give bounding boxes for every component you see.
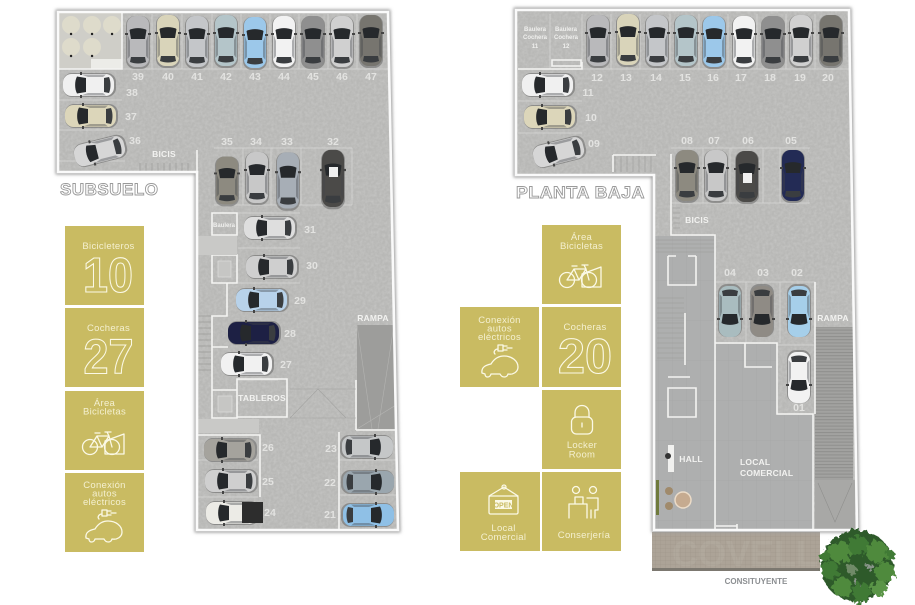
bay numbers: 34 xyxy=(250,136,262,148)
icon: padlock xyxy=(572,406,592,434)
bay numbers: 14 xyxy=(650,72,662,84)
bay numbers: 32 xyxy=(327,136,339,148)
room labels: BICIS xyxy=(685,215,709,225)
tile: bicicleteros: 10 xyxy=(83,249,133,303)
tile: conexion autos electricos: autos xyxy=(92,488,117,500)
tree xyxy=(820,530,896,605)
outer wall xyxy=(516,10,857,530)
bay numbers: 16 xyxy=(707,72,719,84)
cars: lower bays xyxy=(717,284,812,403)
room labels: 12 xyxy=(563,44,570,50)
tile: conexion autos electricos: Conexión xyxy=(83,480,126,491)
room labels: Baulera xyxy=(555,27,578,33)
icon: electric car xyxy=(482,345,518,377)
tile: cocheras 27: 27 xyxy=(84,330,134,384)
bay numbers: 07 xyxy=(708,135,720,147)
room labels: Baulera xyxy=(524,27,547,33)
floor outline shadow xyxy=(516,10,857,530)
light landing patches xyxy=(198,236,259,433)
white columns xyxy=(656,150,808,285)
bay numbers: 44 xyxy=(278,71,290,83)
bay numbers: 45 xyxy=(307,71,319,83)
bay numbers: 11 xyxy=(582,87,594,99)
bay numbers: 13 xyxy=(620,72,632,84)
bay numbers: 38 xyxy=(126,87,138,99)
bay numbers: 41 xyxy=(191,71,203,83)
tile: conserjeria: Conserjería xyxy=(558,530,611,541)
cars: left column xyxy=(522,72,588,171)
tile: area bicicletas: Área xyxy=(571,232,593,243)
tile: conexion autos electricos: Conexión xyxy=(478,315,521,326)
tile: cocheras 20: Cocheras xyxy=(563,322,607,333)
bay numbers: 21 xyxy=(324,509,336,521)
bay numbers: 22 xyxy=(324,477,336,489)
bay numbers: 30 xyxy=(306,260,318,272)
concrete floor xyxy=(516,10,857,530)
bay numbers xyxy=(125,71,377,521)
room labels xyxy=(152,149,389,403)
tile: area bicicletas: Bicicletas xyxy=(560,241,603,252)
tile: area bicicletas: Bicicletas xyxy=(83,406,126,418)
room labels: COMERCIAL xyxy=(740,468,793,478)
tile: cocheras 20: 20 xyxy=(558,330,612,384)
bay numbers: 42 xyxy=(220,71,232,83)
tile: conexion autos electricos: autos xyxy=(487,324,512,334)
white columns xyxy=(197,150,350,202)
bay numbers: 01 xyxy=(793,402,805,414)
icon: concierge xyxy=(569,486,598,518)
stairs xyxy=(140,163,211,370)
tile: conexion autos electricos: eléctricos xyxy=(83,497,126,508)
room labels: 11 xyxy=(532,44,539,50)
plan: subsuelo xyxy=(58,12,398,530)
bay numbers: 33 xyxy=(281,136,293,148)
cars: right of core xyxy=(221,215,299,377)
plan: planta baja xyxy=(516,10,857,530)
room labels xyxy=(523,27,849,478)
ramp approach lines xyxy=(290,389,356,418)
room labels: LOCAL xyxy=(740,457,770,467)
tile: area bicicletas xyxy=(542,225,621,304)
bay numbers: 12 xyxy=(591,72,603,84)
stair block xyxy=(615,156,714,358)
bay numbers: 17 xyxy=(735,72,747,84)
bay numbers: 15 xyxy=(679,72,691,84)
street name: CONSITUYENTE xyxy=(725,577,788,586)
tile: local comercial xyxy=(460,472,540,551)
bay numbers: 05 xyxy=(785,135,797,147)
room labels: Baulera xyxy=(213,223,236,229)
room labels: BICIS xyxy=(152,149,176,159)
icon: electric car xyxy=(86,510,122,542)
tile: locker room: Room xyxy=(569,450,595,460)
local comercial floor xyxy=(716,344,813,530)
room labels: Cochera xyxy=(523,35,548,41)
bay numbers: 08 xyxy=(681,135,693,147)
bay numbers: 39 xyxy=(132,71,144,83)
room labels: RAMPA xyxy=(817,313,849,323)
room labels: Cochera xyxy=(554,35,579,41)
tile: area bicicletas xyxy=(65,391,144,470)
bay numbers: 28 xyxy=(284,328,296,340)
bay numbers: 04 xyxy=(724,267,736,279)
floor outline shadow xyxy=(58,12,398,530)
bay numbers: 20 xyxy=(822,72,834,84)
bay numbers: 47 xyxy=(365,71,377,83)
icon: open sign: OPEN xyxy=(494,502,513,510)
cars: bottom left xyxy=(204,437,263,526)
bay numbers: 36 xyxy=(129,135,141,147)
cars: left column xyxy=(63,72,129,170)
heading: planta baja: PLANTA BAJA xyxy=(516,183,645,202)
bike storage corner xyxy=(59,13,122,69)
bay numbers xyxy=(582,72,834,414)
heading: subsuelo: SUBSUELO xyxy=(60,180,158,199)
bay numbers: 29 xyxy=(294,295,306,307)
reception desk xyxy=(665,445,674,472)
tile: cocheras 27 xyxy=(65,308,144,387)
bay numbers: 27 xyxy=(280,359,292,371)
tile: cocheras 20 xyxy=(542,307,621,387)
bay numbers: 43 xyxy=(249,71,261,83)
tile: cocheras 27: Cocheras xyxy=(87,323,130,334)
icon: bicycle xyxy=(82,432,124,454)
bay numbers: 25 xyxy=(262,476,274,488)
bay numbers: 35 xyxy=(221,136,233,148)
concrete floor xyxy=(58,12,398,530)
tile: conexion autos electricos xyxy=(65,473,144,552)
lounge and planter xyxy=(656,480,691,515)
interior walls xyxy=(59,13,396,530)
bay numbers: 31 xyxy=(304,224,316,236)
outer wall xyxy=(58,12,398,530)
bay numbers: 19 xyxy=(794,72,806,84)
bay numbers: 26 xyxy=(262,442,274,454)
bay lines xyxy=(518,14,849,345)
ramp xyxy=(815,327,855,530)
tile: area bicicletas: Área xyxy=(94,398,116,409)
tile: conserjeria xyxy=(542,472,621,551)
bay numbers: 09 xyxy=(588,138,600,150)
tile: local comercial: Comercial xyxy=(481,532,526,543)
bay numbers: 23 xyxy=(325,443,337,455)
bay numbers: 24 xyxy=(264,507,276,519)
icon: bicycle xyxy=(560,265,601,288)
tile: conexion autos electricos xyxy=(460,307,539,387)
ramp xyxy=(357,325,396,429)
cars: middle row xyxy=(674,150,806,204)
tile: bicicleteros: Bicicleteros xyxy=(82,241,135,252)
parking bay lines xyxy=(59,14,396,497)
cars: top row xyxy=(125,15,384,70)
cars: bottom right xyxy=(340,434,394,528)
cars: middle row xyxy=(214,150,346,211)
bay numbers: 06 xyxy=(742,135,754,147)
room labels: HALL xyxy=(679,454,703,464)
bay numbers: 37 xyxy=(125,111,137,123)
bay numbers: 03 xyxy=(757,267,769,279)
bay numbers: 46 xyxy=(336,71,348,83)
lift shafts xyxy=(218,261,232,412)
bay numbers: 40 xyxy=(162,71,174,83)
tile: local comercial: Local xyxy=(491,523,516,534)
walls xyxy=(518,60,815,530)
bay numbers: 02 xyxy=(791,267,803,279)
bay numbers: 18 xyxy=(764,72,776,84)
paving: sidewalk: COVELLO xyxy=(672,533,846,574)
tile: locker room xyxy=(542,390,621,469)
room labels: TABLEROS xyxy=(238,393,286,403)
room labels: RAMPA xyxy=(357,313,389,323)
tile: conexion autos electricos: eléctricos xyxy=(478,332,521,343)
bay numbers: 10 xyxy=(585,112,597,124)
hall floor xyxy=(655,236,715,530)
cars: top row xyxy=(585,14,844,69)
tile: bicicleteros xyxy=(65,226,144,305)
tile: locker room: Locker xyxy=(567,440,597,451)
